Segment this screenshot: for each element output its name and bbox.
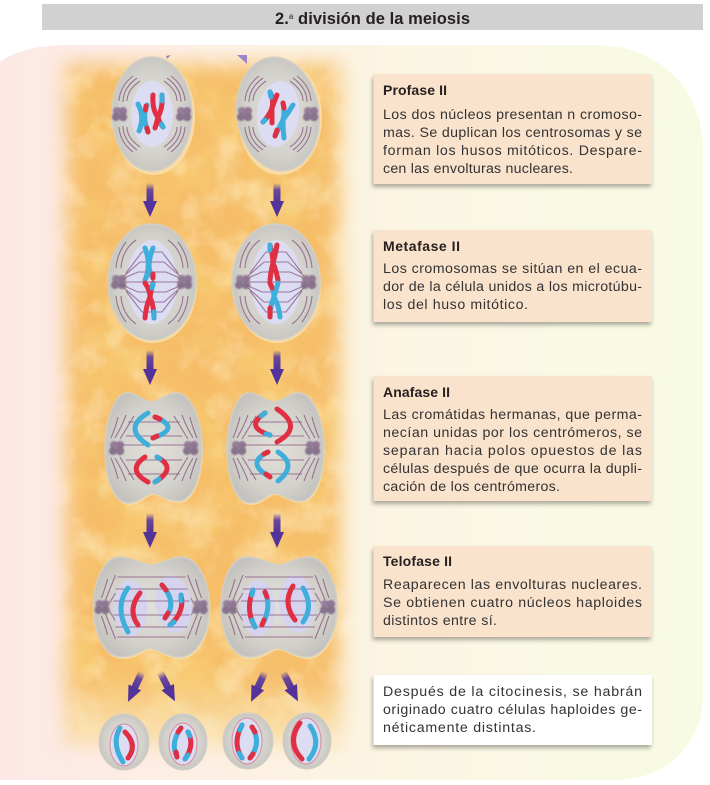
heading: Profase II: Profase II: [383, 82, 447, 98]
text: Anafase II: células después de que ocurra la dupli-: [383, 461, 642, 477]
arrow fragments from previous stage: [166, 55, 247, 64]
orange textured backdrop: [51, 50, 355, 756]
text: Anafase II: cación de los centrómeros.: [383, 479, 560, 495]
arrow: metaphase to anaphase left: [143, 350, 157, 385]
title: 2.: [275, 10, 289, 28]
text: Metafase II: dor de la célula unidos a los microtúbu-: [383, 279, 642, 295]
text: Metafase II: Los cromosomas se sitúan en el ecua-: [383, 261, 642, 277]
chromosomes: anaphase II right: [256, 409, 290, 481]
arrow: anaphase to telophase left: [143, 513, 157, 548]
cell: metaphase II right: [232, 224, 321, 343]
text: Anafase II: [383, 407, 642, 495]
text: Anafase II: necían unidas por los centrómeros, se: [383, 425, 642, 441]
cell: anaphase II left: [105, 393, 203, 505]
cell: prophase II left: [112, 57, 195, 175]
cell: telophase II left: [94, 557, 210, 659]
text: Telofase II: distintos entre sí.: [383, 613, 497, 629]
arrow: metaphase to anaphase right: [270, 350, 284, 385]
text: citocinesis note: [383, 684, 642, 736]
heading: Metafase II: Metafase II: [383, 238, 460, 254]
cell: telophase II right: [221, 557, 338, 659]
arrow: prophase to metaphase right: [270, 183, 284, 217]
text: Anafase II: separan hacia polos opuestos de las: [383, 443, 642, 459]
panel: Telofase II: [374, 546, 652, 637]
text: citocinesis note: néticamente distintas.: [383, 720, 536, 736]
arrow: prophase to metaphase left: [143, 183, 157, 217]
text: Profase II: cen las envolturas nucleares.: [383, 161, 573, 177]
title: división de la meiosis: [293, 10, 470, 28]
heading: Telofase II: Telofase II: [383, 553, 452, 569]
text: Profase II: [383, 107, 642, 177]
chromosomes: telophase II left: [121, 585, 182, 632]
panel: citocinesis note: [374, 675, 652, 745]
text: citocinesis note: originado cuatro células haploides ge-: [383, 702, 642, 718]
arrow: anaphase to telophase right: [270, 513, 284, 548]
panel: Anafase II: [374, 376, 652, 501]
diagram: meiosis II cells column: [94, 52, 338, 770]
text: Profase II: forman los husos mitóticos. Despare-: [383, 143, 642, 159]
cell: anaphase II right: [227, 393, 325, 505]
chromosomes: anaphase II left: [135, 413, 168, 482]
text: citocinesis note: Después de la citocinesis, se habrán: [383, 684, 642, 700]
text: Anafase II: Las cromátidas hermanas, que perma-: [383, 407, 642, 423]
text: Profase II: Los dos núcleos presentan n cromoso-: [383, 107, 642, 123]
text: Profase II: mas. Se duplican los centrosomas y se: [383, 125, 642, 141]
chromosomes: telophase II right: [249, 586, 308, 627]
text: Telofase II: [383, 577, 642, 629]
daughter cell 2: [159, 714, 207, 770]
title: a: [289, 12, 294, 21]
panel: Profase II: [374, 74, 652, 184]
text: Telofase II: Se obtienen cuatro núcleos haploides: [383, 595, 642, 611]
title bar: [42, 4, 703, 30]
chromosomes: metaphase II left: [145, 248, 154, 318]
chromosomes: prophase II left: [138, 95, 163, 132]
arrows: telophase to daughter cells: [122, 669, 304, 705]
daughter cell 4: [283, 713, 331, 769]
daughter cell 3: [223, 713, 273, 769]
text: Metafase II: los del huso mitótico.: [383, 297, 528, 313]
heading: Anafase II: Anafase II: [383, 384, 450, 400]
text: Telofase II: Reaparecen las envolturas nucleares.: [383, 577, 642, 593]
daughter cell 1: [99, 714, 149, 770]
text: Metafase II: [383, 261, 642, 313]
chromosomes: prophase II right: [263, 92, 293, 138]
panel: Metafase II: [374, 230, 652, 322]
cell: prophase II right: [229, 52, 327, 176]
chromosomes: metaphase II right: [270, 245, 280, 317]
cell: metaphase II left: [108, 224, 197, 343]
